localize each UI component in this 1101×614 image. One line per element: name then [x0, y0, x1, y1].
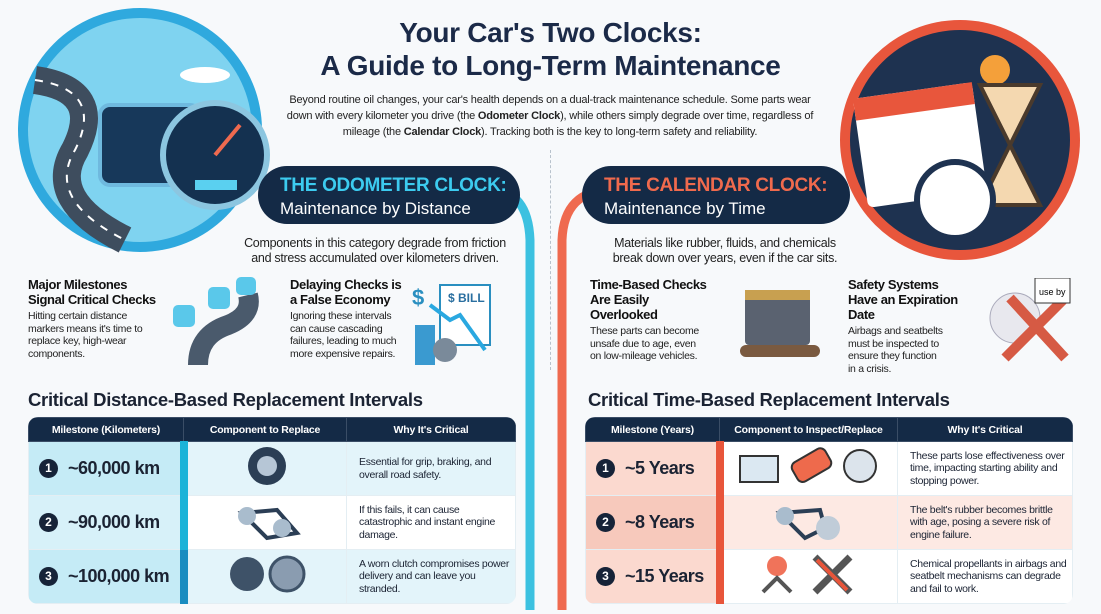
- table: distance: Why It's Critical: [394, 424, 468, 436]
- icon: bill and coins: $: [412, 285, 424, 310]
- divider line: [550, 150, 551, 370]
- title: Your Car's Two Clocks:: [399, 17, 702, 48]
- icon: calendar and hourglass illustration: [840, 20, 1080, 260]
- feature: time-based: These parts can become unsafe due to age, even on low-mileage vehicles.: [590, 325, 699, 362]
- icon: airbag and seatbelt: [990, 278, 1070, 362]
- heading: time intervals: Critical Time-Based Replacement Intervals: [588, 389, 950, 410]
- table: distance: 3: [45, 569, 52, 583]
- table: distance: Essential for grip, braking, and overall road safety.: [359, 456, 491, 480]
- table: time: [585, 417, 1073, 604]
- icon: old battery: [740, 290, 820, 357]
- icon: odometer illustration: [18, 8, 270, 252]
- icon: airbag and seatbelt: use by: [1039, 287, 1066, 297]
- feature: time-based: [590, 277, 707, 362]
- table: distance: A worn clutch compromises power delivery and can leave you stranded.: [359, 558, 509, 595]
- feature: milestones: [28, 277, 156, 360]
- red path line: [558, 192, 583, 610]
- table: time: 2: [602, 515, 609, 529]
- table: distance: ~100,000 km: [68, 566, 169, 586]
- table: time: ~8 Years: [625, 512, 694, 532]
- icon: bill and coins: $ BILL: [448, 291, 485, 305]
- table: distance: If this fails, it can cause catastrophic and instant engine damage.: [359, 504, 495, 541]
- banner: calendar clock: Maintenance by Time: [604, 199, 766, 218]
- banner: calendar clock: THE CALENDAR CLOCK:: [604, 175, 827, 196]
- table: distance: 2: [45, 515, 52, 529]
- feature: safety systems: Safety Systems Have an Expiration Date: [848, 277, 958, 322]
- title: [320, 17, 781, 81]
- banner: calendar clock: [582, 166, 850, 224]
- table: distance: Component to Replace: [210, 424, 320, 436]
- table: time: 3: [602, 569, 609, 583]
- table: time: ~15 Years: [625, 566, 704, 586]
- table: time: Why It's Critical: [948, 424, 1022, 436]
- feature: false economy: [290, 277, 402, 360]
- banner: odometer clock: Maintenance by Distance: [280, 199, 471, 218]
- intro text: Beyond routine oil changes, your car's health depends on a dual-track maintenance schedule. Some parts wear down with every kilometer you drive (the Odometer Clock), while others simply degrade over time, regardless of mileage (the Calendar Clock). Tracking both is the key to long-term safety and reliability.: [287, 94, 813, 138]
- table: time: These parts lose effectiveness over time, impacting starting ability and stopping power.: [910, 450, 1064, 487]
- table: distance: ~60,000 km: [68, 458, 160, 478]
- table: time: The belt's rubber becomes brittle with age, posing a severe risk of engine failure.: [910, 504, 1053, 541]
- feature: time-based: Time-Based Checks Are Easily Overlooked: [590, 277, 707, 322]
- icon: km road signs: [173, 277, 259, 365]
- banner: odometer clock: [258, 166, 520, 224]
- banner: odometer clock: THE ODOMETER CLOCK:: [280, 175, 507, 196]
- feature: false economy: Delaying Checks is a False Economy: [290, 277, 401, 307]
- table: distance: Milestone (Kilometers): [52, 424, 160, 436]
- feature: safety systems: Airbags and seatbelts must be inspected to ensure they function in a crisis.: [848, 325, 943, 374]
- feature: milestones: Major Milestones Signal Critical Checks: [28, 277, 156, 307]
- table: time: ~5 Years: [625, 458, 694, 478]
- subtext left: Components in this category degrade from friction and stress accumulated over kilometers driven.: [244, 236, 506, 265]
- feature: false economy: Ignoring these intervals can cause cascading failures, leading to much more expensive repairs.: [290, 310, 396, 360]
- feature: milestones: Hitting certain distance markers means it's time to replace key, high-wear components.: [28, 310, 142, 360]
- heading: distance intervals: Critical Distance-Based Replacement Intervals: [28, 389, 423, 410]
- table: time: 1: [602, 461, 609, 475]
- table: time: Chemical propellants in airbags and seatbelt mechanisms can degrade and fail to work.: [910, 558, 1066, 595]
- feature: safety systems: [848, 277, 958, 374]
- table: time: Milestone (Years): [611, 424, 694, 436]
- table: distance: 1: [45, 461, 52, 475]
- table: time: Component to Inspect/Replace: [734, 424, 883, 436]
- icon: bill and coins: [412, 284, 491, 365]
- title: A Guide to Long-Term Maintenance: [320, 50, 781, 81]
- subtext right: Materials like rubber, fluids, and chemicals break down over years, even if the car sits.: [613, 236, 837, 265]
- cyan path line: [517, 196, 534, 610]
- table: distance: [28, 417, 516, 604]
- table: distance: ~90,000 km: [68, 512, 160, 532]
